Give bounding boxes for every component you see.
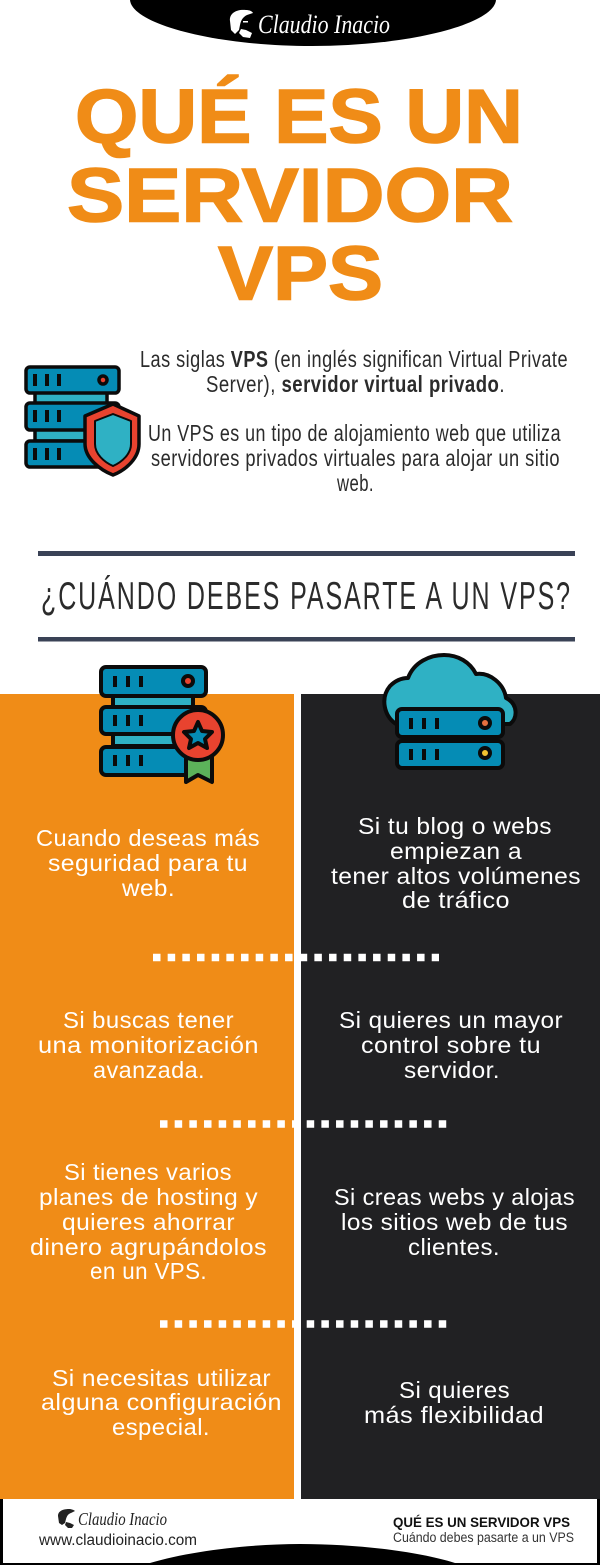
row 2 left text: una monitorización [38, 1032, 259, 1058]
row 4 right text [364, 1377, 544, 1428]
row 2 left text [38, 1007, 259, 1083]
row 1 left text: Cuando deseas más [36, 825, 260, 851]
title: QUÉ ES UN [75, 74, 523, 160]
row 3 left text: en un VPS. [90, 1258, 207, 1284]
row 2 right text: Si quieres un mayor [339, 1007, 563, 1033]
row 4 right text: Si quieres [399, 1377, 510, 1403]
row 3 left text: dinero agrupándolos [30, 1234, 267, 1260]
divider dots 3 [160, 1320, 447, 1328]
icon: face logo [230, 10, 253, 38]
panel: right dark [301, 694, 600, 1499]
row 1 right text [331, 813, 581, 913]
row 3 right text: clientes. [408, 1234, 500, 1260]
footer url: www.claudioinacio.com [38, 1532, 197, 1549]
row 3 left text: planes de hosting y [39, 1184, 258, 1210]
footer [0, 1499, 600, 1565]
header banner with logo [130, 0, 496, 46]
icon: cloud server [384, 655, 516, 768]
row 3 left text [30, 1159, 267, 1284]
row 3 left text: Si tienes varios [64, 1159, 232, 1185]
logo text: Claudio Inacio [258, 10, 390, 39]
row 3 left text: quieres ahorrar [62, 1209, 235, 1235]
row 2 left text: avanzada. [93, 1057, 205, 1083]
row 4 left text [41, 1365, 282, 1440]
title: SERVIDOR [67, 154, 513, 238]
icon: server with award badge [101, 667, 223, 782]
row 2 right text [339, 1007, 563, 1083]
intro text: Server), servidor virtual privado. [206, 371, 505, 397]
panel: left orange [0, 694, 294, 1499]
row 1 right text: de tráfico [402, 887, 510, 913]
row 2 right text: control sobre tu [361, 1032, 541, 1058]
row 1 left text [36, 825, 260, 901]
row 4 right text: más flexibilidad [364, 1402, 544, 1428]
section heading [38, 551, 575, 642]
title [67, 74, 523, 316]
row 1 right text: empiezan a [390, 838, 522, 864]
row 4 left text: Si necesitas utilizar [52, 1365, 271, 1391]
intro text: web. [336, 470, 374, 496]
intro text [140, 346, 568, 496]
divider dots 2 [160, 1120, 447, 1128]
footer subtitle: Cuándo debes pasarte a un VPS [393, 1530, 574, 1545]
row 3 right text: Si creas webs y alojas [334, 1184, 575, 1210]
row 2 left text: Si buscas tener [63, 1007, 234, 1033]
row 4 left text: especial. [112, 1414, 210, 1440]
footer logo text: Claudio Inacio [78, 1509, 167, 1529]
row 1 right text: Si tu blog o webs [358, 813, 552, 839]
divider dots 1 [153, 954, 439, 961]
row 3 right text [334, 1184, 575, 1260]
row 3 right text: los sitios web de tus [341, 1209, 568, 1235]
row 1 right text: tener altos volúmenes [331, 863, 581, 889]
title: VPS [218, 232, 383, 316]
icon: footer face logo [58, 1509, 75, 1528]
row 4 left text: alguna configuración [41, 1389, 282, 1415]
row 1 left text: web. [121, 875, 175, 901]
icon: server with shield [26, 367, 139, 475]
row 1 left text: seguridad para tu [48, 850, 248, 876]
footer title: QUÉ ES UN SERVIDOR VPS [393, 1514, 570, 1530]
row 2 right text: servidor. [404, 1057, 500, 1083]
